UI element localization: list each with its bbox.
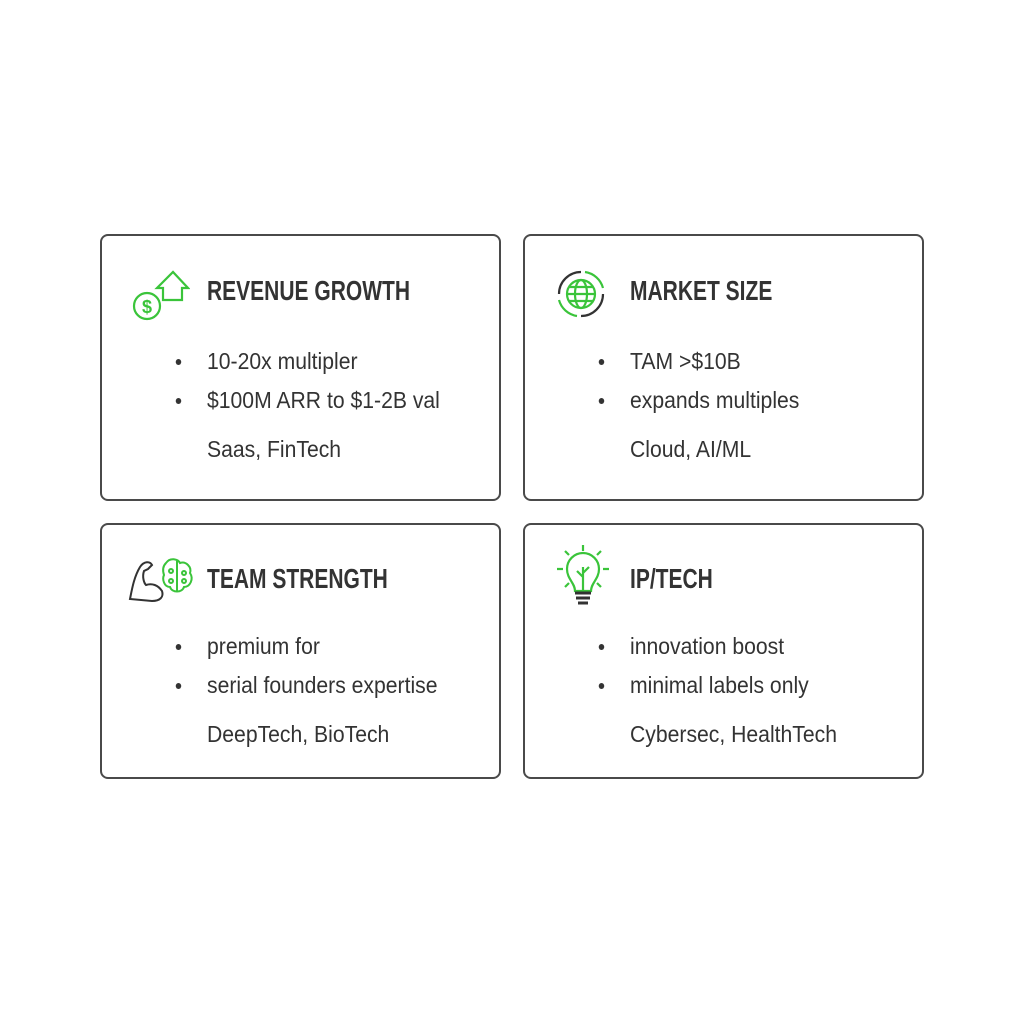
panel: ip tech: minimal labels only xyxy=(630,672,809,698)
icon: globe with cycle arrows xyxy=(558,270,604,318)
icon: dollar with up arrow xyxy=(132,270,190,320)
panel: revenue growth: $100M ARR to $1-2B val xyxy=(207,387,440,413)
sectors: Cybersec, HealthTech xyxy=(630,721,837,747)
icon: dollar with up arrow: $ xyxy=(142,297,152,317)
heading: IP/TECH xyxy=(630,563,713,594)
bullets: innovation boost xyxy=(630,633,784,659)
sectors: DeepTech, BioTech xyxy=(207,721,389,747)
panel: team strength xyxy=(100,523,501,779)
bullets: 10-20x multipler xyxy=(207,348,358,374)
icon: lightbulb xyxy=(557,545,609,604)
sectors: Cloud, AI/ML xyxy=(630,436,751,462)
icon: arm and brain xyxy=(128,558,193,602)
panel: revenue growth xyxy=(100,234,501,501)
panel: team strength: serial founders expertise xyxy=(207,672,438,698)
panel: ip tech xyxy=(523,523,924,779)
heading: TEAM STRENGTH xyxy=(207,563,388,594)
bullets: TAM >$10B xyxy=(630,348,741,374)
bullets: premium for xyxy=(207,633,320,659)
panel: market size xyxy=(523,234,924,501)
heading: REVENUE GROWTH xyxy=(207,275,410,306)
heading: MARKET SIZE xyxy=(630,275,772,306)
sectors: Saas, FinTech xyxy=(207,436,341,462)
panel: market size: expands multiples xyxy=(630,387,799,413)
